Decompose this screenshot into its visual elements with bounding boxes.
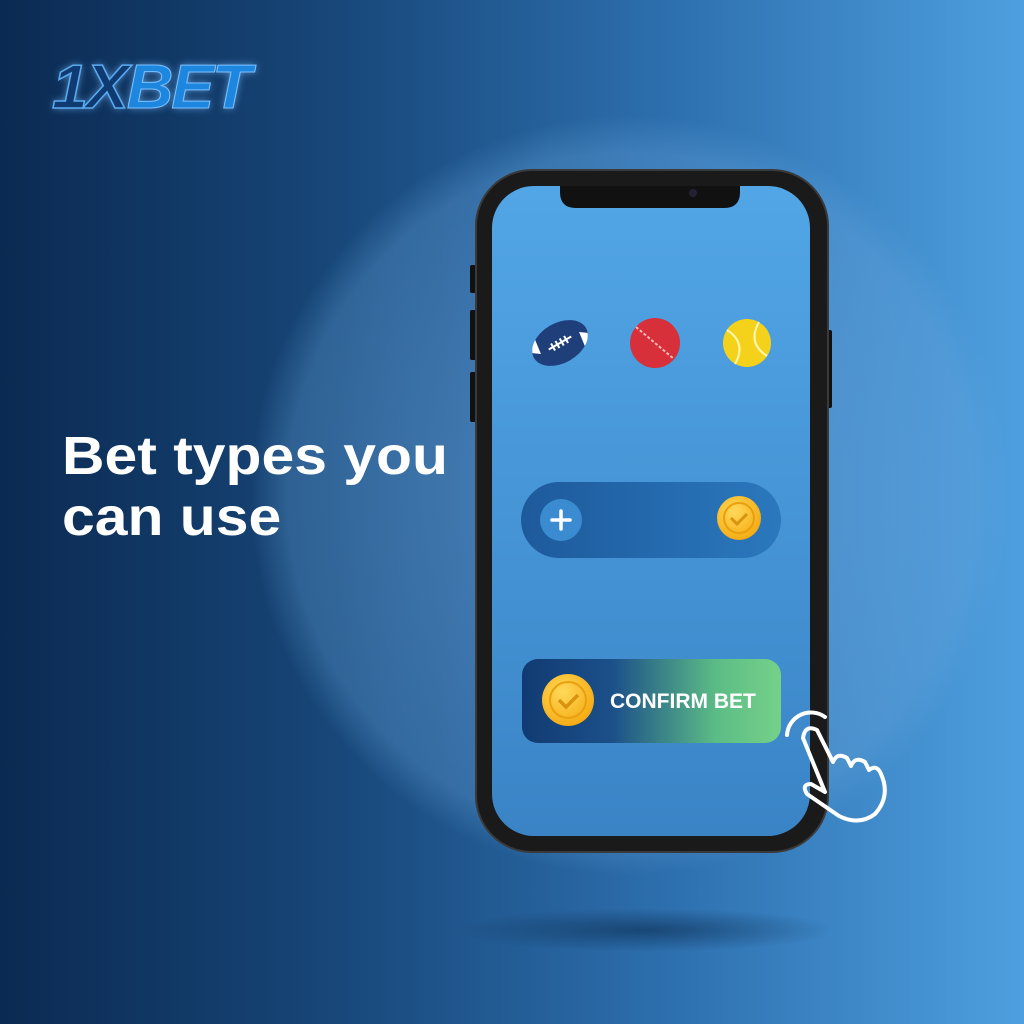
- button: confirm bet: [522, 659, 781, 743]
- icon: cricket ball: [630, 318, 680, 368]
- phone: [470, 170, 832, 852]
- title: Bet types you: [62, 426, 448, 486]
- icon: tennis ball: [723, 319, 771, 367]
- button: confirm bet: CONFIRM BET: [610, 690, 756, 713]
- logo: 1XBET: [52, 53, 249, 122]
- icon: american football: [524, 311, 596, 375]
- shadow: [455, 908, 835, 952]
- title: [62, 426, 448, 547]
- pill: stake: [521, 482, 781, 558]
- title: can use: [62, 487, 281, 547]
- icon: hand pointer: [787, 712, 885, 821]
